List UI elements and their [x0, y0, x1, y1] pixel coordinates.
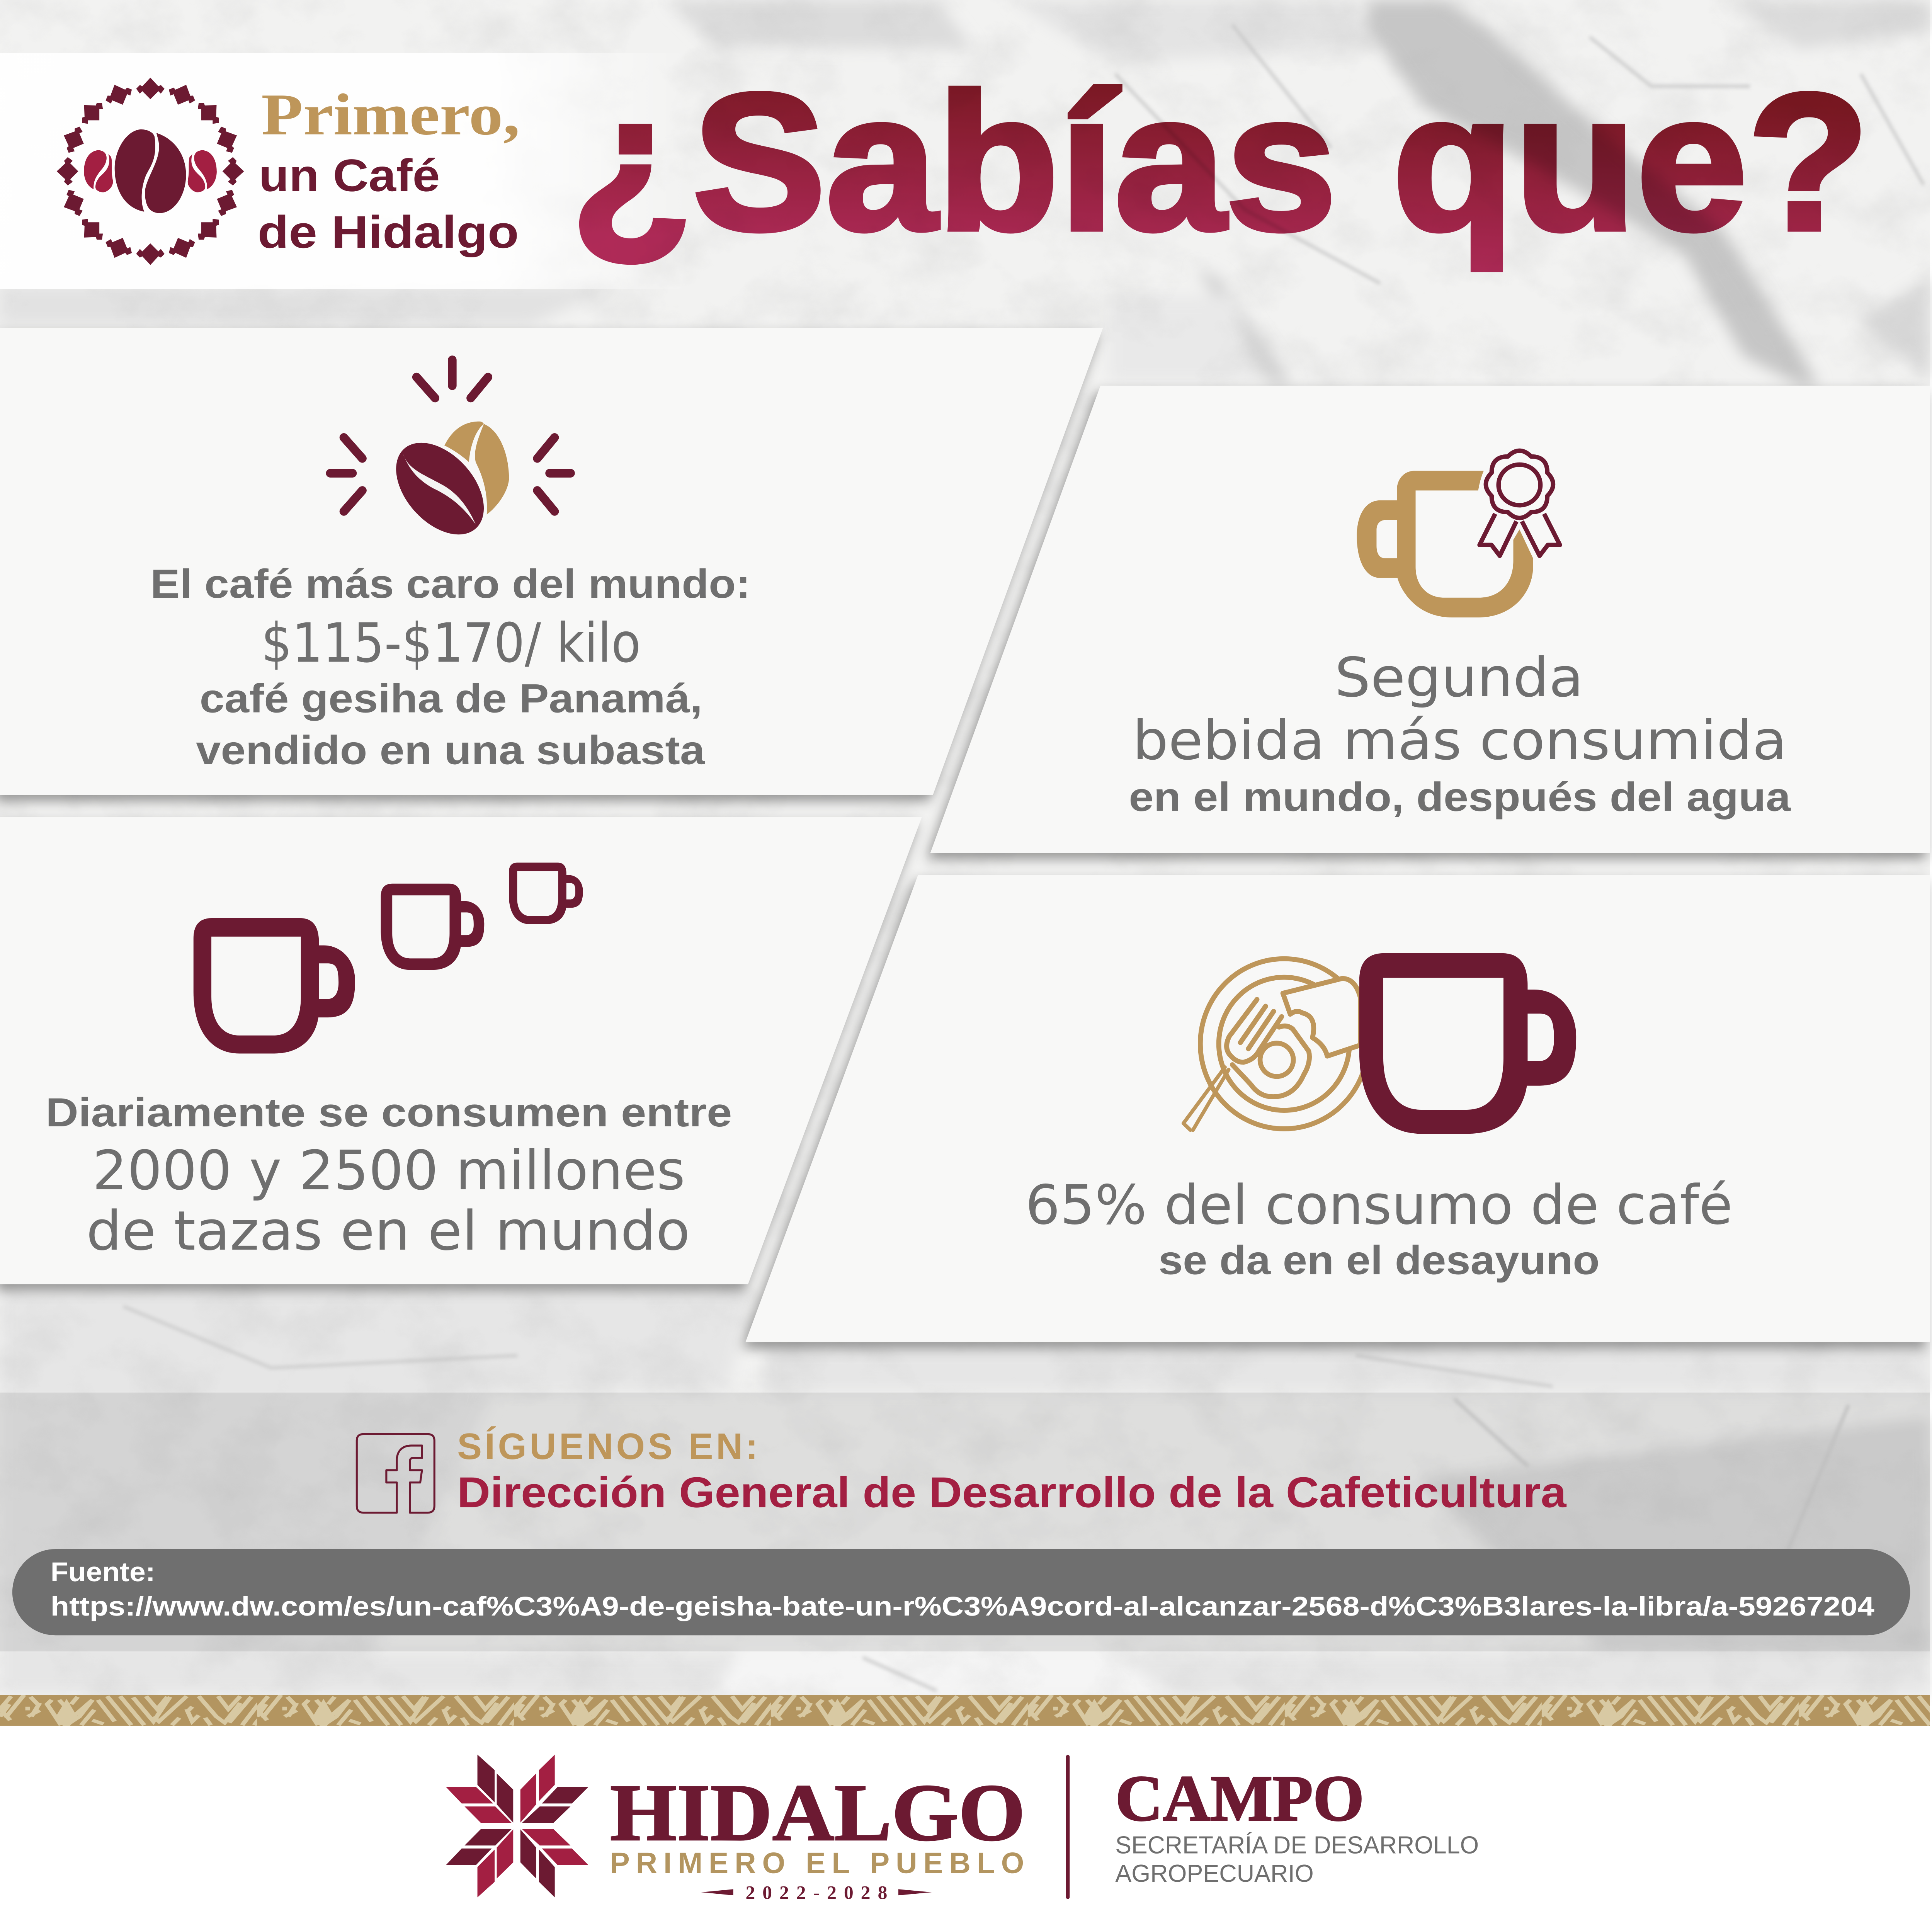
text: second most consumed drink — [1129, 647, 1791, 820]
text: most expensive coffee: café gesiha de Panamá, — [200, 675, 702, 721]
icon: large breakfast mug — [1359, 953, 1576, 1134]
text: daily cups: Diariamente se consumen entre — [46, 1089, 732, 1135]
title: ¿Sabías que? — [571, 54, 1869, 271]
logo text — [258, 83, 520, 258]
icon: medium mug — [381, 884, 484, 970]
gray follow band — [0, 1393, 1930, 1651]
white footer — [0, 1725, 1930, 1931]
panel: most expensive coffee — [0, 328, 1103, 795]
follow us text: SÍGUENOS EN: — [457, 1426, 758, 1468]
text: most expensive coffee: vendido en una subasta — [196, 727, 706, 773]
logo text: un Café — [259, 150, 440, 201]
icon: large mug — [194, 918, 355, 1053]
years: 2022-2028 — [746, 1883, 888, 1904]
icon: ring of diamonds — [57, 78, 244, 265]
text: most expensive coffee: El café más caro del mundo: — [150, 561, 750, 606]
icon: small mug — [509, 863, 583, 924]
organization name: Dirección General de Desarrollo de la Cafeticultura — [457, 1469, 1567, 1517]
text: most expensive coffee — [150, 561, 750, 773]
follow us block — [357, 1426, 1567, 1517]
icon: breakfast plate with fork — [1184, 959, 1368, 1130]
text: breakfast consumption: se da en el desayuno — [1158, 1237, 1600, 1283]
logo: Campo — [1115, 1764, 1479, 1888]
logo: Primero, un Café de Hidalgo — [57, 78, 520, 265]
text: daily cups: de tazas en el mundo — [86, 1200, 690, 1263]
text: breakfast consumption — [1025, 1174, 1733, 1283]
source pill: Fuente: — [51, 1556, 155, 1587]
source pill — [12, 1549, 1910, 1635]
text: second most consumed drink: bebida más consumida — [1133, 710, 1787, 773]
text: second most consumed drink: en el mundo, después del agua — [1129, 774, 1791, 820]
text: breakfast consumption: 65% del consumo de café — [1025, 1174, 1733, 1237]
icon: shining coffee beans — [330, 360, 571, 551]
header panel — [0, 53, 690, 289]
logo: Campo: AGROPECUARIO — [1115, 1861, 1314, 1888]
Primero el pueblo: PRIMERO EL PUEBLO — [610, 1847, 1024, 1881]
divider — [1066, 1755, 1070, 1899]
text: most expensive coffee: $115-$170/ kilo — [261, 612, 641, 675]
panel: breakfast consumption — [746, 875, 1930, 1342]
logo text: Primero, — [261, 83, 520, 148]
panel: daily cups — [0, 817, 922, 1284]
icon: three coffee beans — [84, 129, 217, 213]
logo: Hidalgo — [446, 1755, 1025, 1904]
logo: Campo: CAMPO — [1115, 1764, 1364, 1835]
source pill: https://www.dw.com/es/un-caf%C3%A9-de-geisha-bate-un-r%C3%A9cord-al-alcanzar-2568-d%C3%B3lares-la-libra/a-59267204 — [51, 1591, 1876, 1622]
icon: Hidalgo star — [446, 1755, 588, 1897]
text: second most consumed drink: Segunda — [1335, 647, 1583, 710]
logo text: de Hidalgo — [258, 207, 519, 258]
decorative ribbon — [0, 1695, 1930, 1726]
icon: cup with award ribbon — [1357, 451, 1560, 617]
icon: facebook outline — [357, 1434, 434, 1513]
text: daily cups — [46, 1089, 732, 1263]
logo: Campo: SECRETARÍA DE DESARROLLO — [1115, 1831, 1479, 1860]
panel: second most consumed drink — [930, 386, 1930, 853]
years — [701, 1883, 932, 1904]
text: daily cups: 2000 y 2500 millones — [92, 1140, 685, 1203]
Hidalgo wordmark: HIDALGO — [610, 1769, 1025, 1858]
